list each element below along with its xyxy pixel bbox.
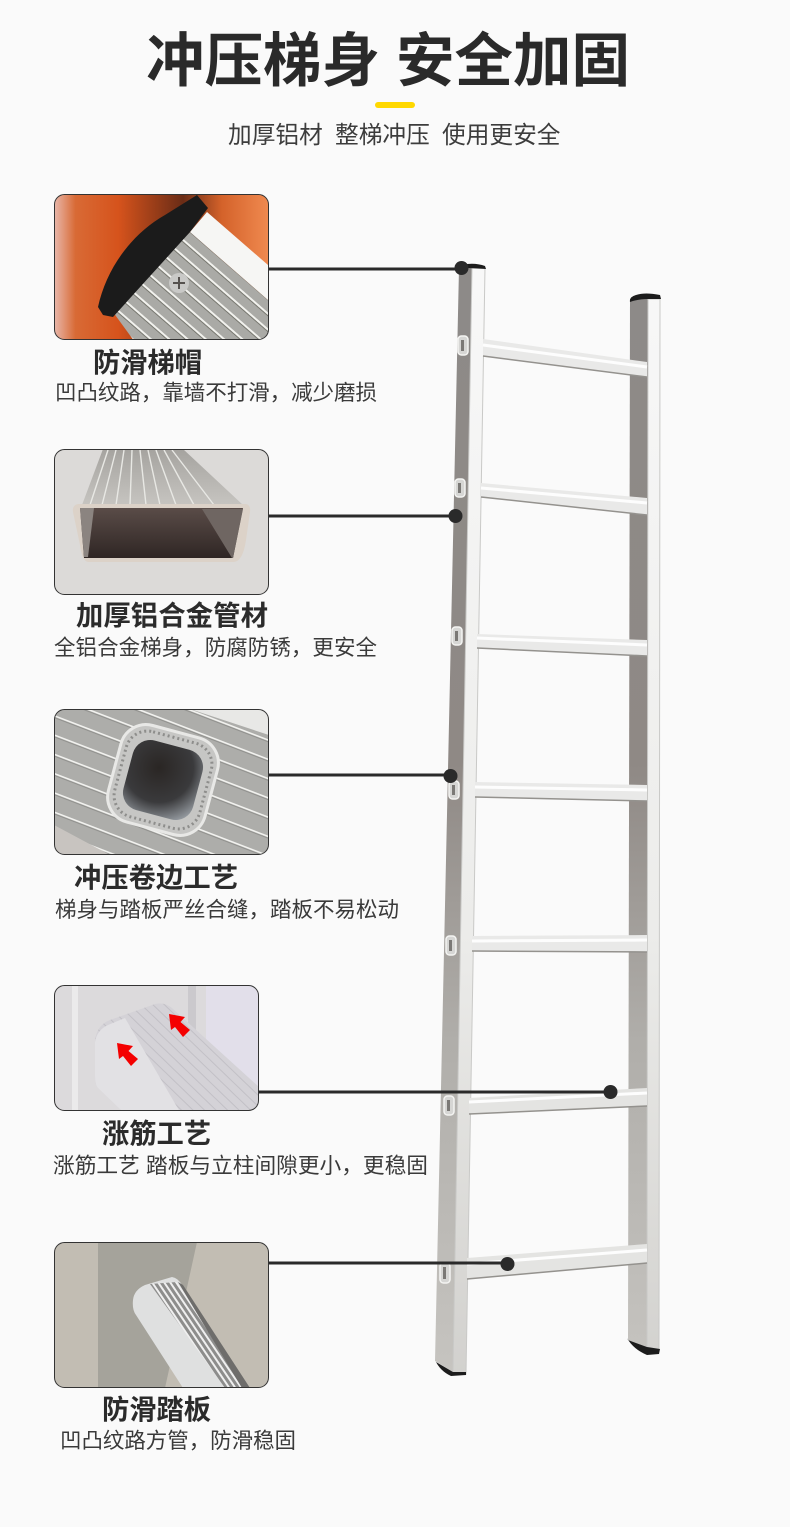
description: 涨筋工艺 (53, 1153, 140, 1178)
subtitle: 使用更安全 (442, 122, 561, 149)
rung highlights (467, 345, 647, 1264)
subtitle: 整梯冲压 (335, 122, 430, 149)
description: 全铝合金梯身，防腐防锈，更安全 (54, 636, 377, 660)
heading: 冲压卷边工艺 (74, 862, 238, 893)
left rail (435, 264, 486, 1376)
panel: stamped rolled edge (54, 709, 399, 922)
right rail (627, 294, 661, 1355)
description: 踏板与立柱间隙更小，更稳固 (146, 1153, 428, 1178)
photo: tube section (54, 449, 269, 595)
panel: expanded rib process (53, 985, 428, 1178)
description: 凹凸纹路，靠墙不打滑，减少磨损 (55, 381, 377, 405)
title accent bar (375, 102, 415, 108)
icon: red arrow left (117, 1043, 138, 1066)
photo: tread joint (54, 1242, 269, 1388)
rail rung holes (440, 336, 468, 1283)
rungs (467, 339, 647, 1279)
description: 梯身与踏板严丝合缝，踏板不易松动 (55, 898, 399, 922)
title: 安全加固 (396, 29, 630, 94)
photo: rib joint (54, 985, 259, 1112)
heading: 防滑踏板 (102, 1394, 211, 1425)
ladder illustration (435, 264, 661, 1376)
description: 凹凸纹路方管，防滑稳固 (60, 1429, 296, 1453)
panel: thick aluminium tube (54, 449, 377, 660)
subtitle: 加厚铝材 (228, 122, 323, 149)
heading: 涨筋工艺 (102, 1118, 211, 1149)
rung shadows (467, 356, 647, 1279)
title: 冲压梯身 (146, 29, 380, 94)
panel: anti-slip ladder cap (54, 194, 377, 405)
heading: 加厚铝合金管材 (76, 600, 268, 631)
icon: red arrow right (169, 1014, 190, 1037)
heading: 防滑梯帽 (93, 347, 202, 378)
photo: rolled hole (54, 709, 269, 855)
panel: anti-slip tread (54, 1242, 296, 1453)
callout dots (444, 261, 618, 1271)
callout lines (258, 269, 610, 1263)
photo: ladder cap (54, 194, 269, 345)
